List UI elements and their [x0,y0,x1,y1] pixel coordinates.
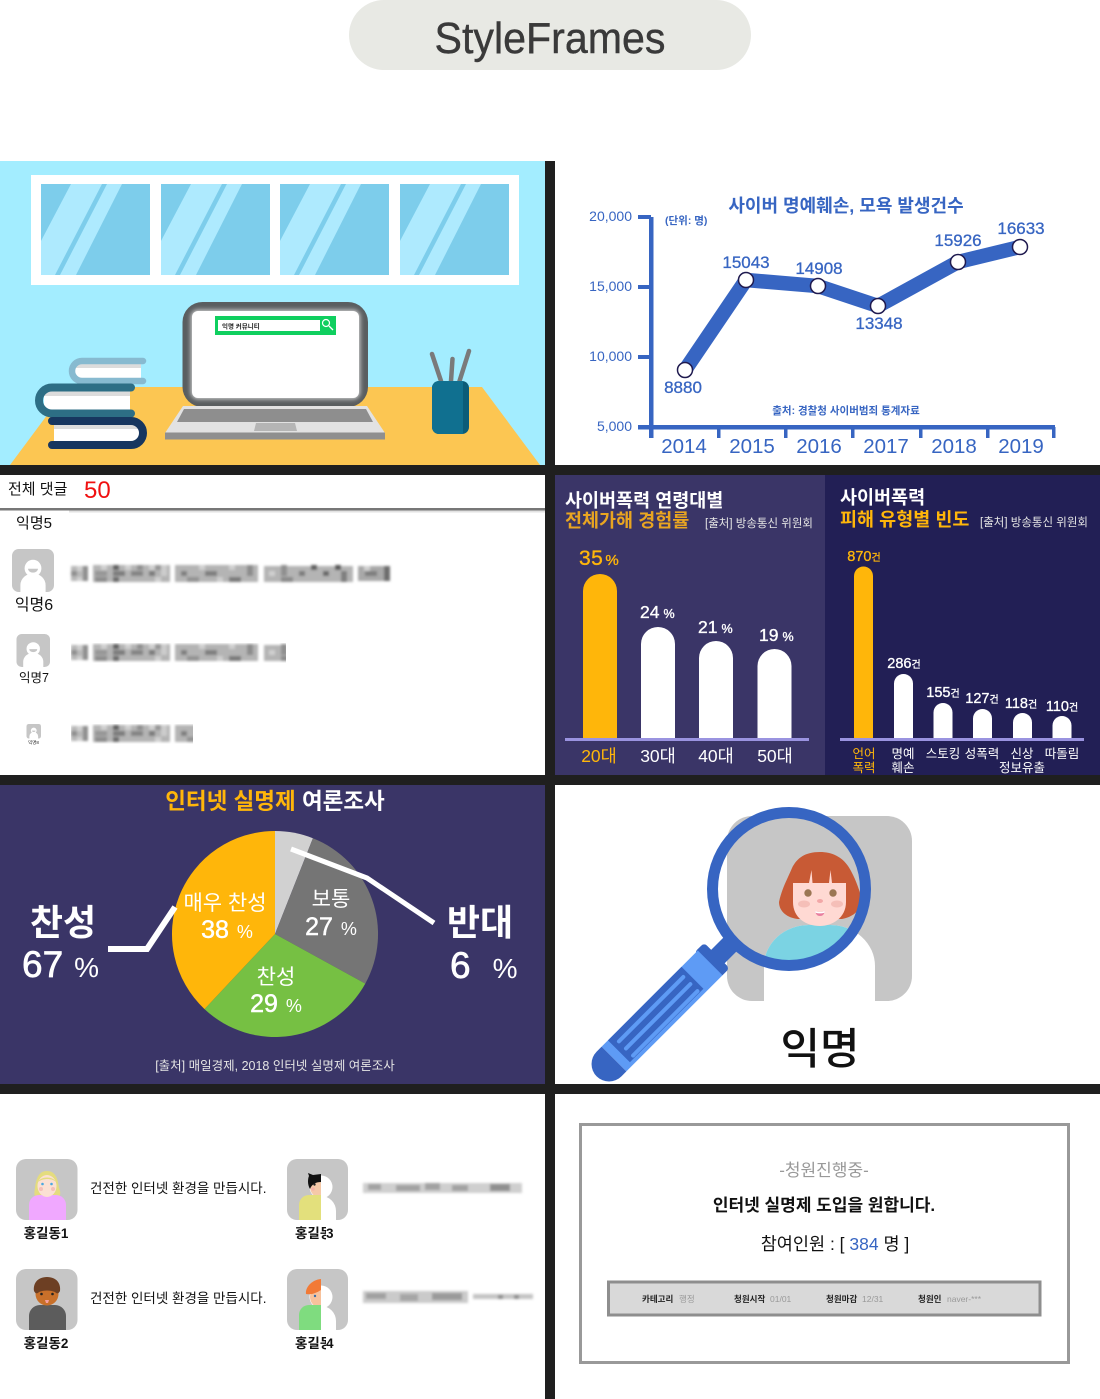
heading: 사이버폭력 [840,487,925,508]
slice labels: 보통 [312,888,350,911]
source: 출처: 경찰청 사이버범죄 통계자료 [772,404,920,417]
meta box: 01/01 [770,1294,792,1304]
age labels: 30대 [640,746,676,766]
data points [678,240,1028,378]
face in lens [766,852,860,960]
values: 127건 [965,691,999,707]
unit note: (단위: 명) [665,214,707,227]
values: 110건 [1046,699,1078,715]
data line [685,247,1020,370]
desk [10,387,540,465]
panel: age bar chart [555,475,825,775]
petition title: 인터넷 실명제 도입을 원합니다. [713,1196,935,1215]
total agree: 67 % [22,944,99,985]
heading: 인터넷 실명제 여론조사 [165,789,385,814]
comment: 익명6 [12,549,390,614]
comment: 홍길동3: 3 [326,1226,334,1241]
source: [출처] 매일경제, 2018 인터넷 실명제 여론조사 [155,1059,395,1073]
values [579,547,794,645]
label: 익명 [780,1026,860,1074]
heading: 피해 유형별 빈도 [840,509,969,530]
comment: 홍길동1: 건전한 인터넷 환경을 만듭시다. [90,1181,266,1196]
comment header: 50 [84,477,111,504]
meta box: 12/31 [862,1294,884,1304]
comment: 익명5: 익명5 [16,515,52,532]
comment: 홍길동4: 4 [326,1336,334,1351]
type labels: 성폭력 [965,747,999,761]
slice labels: 38 % [201,916,253,944]
values: 118건 [1005,696,1037,712]
type labels: 언어 [852,747,876,761]
meta box: 청원마감 [826,1294,857,1304]
values: 19 % [759,625,794,645]
values [847,549,1078,715]
status: -청원진행중- [779,1161,869,1180]
icon: laptop with search bar: 익명 커뮤니티 [222,322,260,330]
comment header [0,477,545,512]
data values: 8880 [664,378,702,397]
leader lines [108,849,434,949]
panel: named comments [16,1159,533,1351]
panel: anonymous magnifier [592,807,912,1082]
meta box: 청원인 [918,1294,942,1304]
type labels: 명예 [891,747,915,761]
window [31,175,519,285]
title pill: StyleFrames [434,14,666,63]
comment: 홍길동2: 홍길동2 [24,1335,68,1351]
avatar silhouette [727,816,912,1002]
x axis labels [661,435,1044,458]
type labels: 훼손 [891,761,915,775]
x axis labels: 2017 [863,435,909,458]
data values: 15926 [934,231,982,250]
icon: pen holder [432,351,469,434]
x axis labels: 2014 [661,435,707,458]
chart title: 사이버 명예훼손, 모욕 발생건수 [728,196,964,216]
data values: 16633 [997,219,1045,238]
type labels [852,747,1079,775]
type labels: 신상 [1010,747,1034,761]
total agree: 찬성 [30,902,96,943]
y axis labels [589,208,632,434]
data values: 14908 [795,259,843,278]
heading [840,487,969,530]
age labels [581,746,793,766]
heading: 전체가해 경험률 [565,510,689,531]
total against [447,902,517,986]
comment: 익명6: 익명6 [15,596,53,614]
data values [664,219,1045,397]
total against: 6 % [450,945,517,986]
meta box: naver-*** [947,1294,982,1304]
age labels: 40대 [698,746,734,766]
values: 870건 [847,549,881,565]
panel: desk illustration [0,161,545,465]
bars [565,574,809,741]
comment: 홍길동3: 홍길동 [295,1225,332,1241]
comment: 홍길동4: 홍길동 [295,1335,332,1351]
slice labels: 매우 찬성 [183,892,267,915]
comment: 홍길동1 [16,1159,266,1241]
source: [출처] 방송통신 위원회 [980,515,1088,529]
comment: 홍길동2 [16,1269,266,1351]
comment header: 전체 댓글 [8,481,68,498]
meta box [608,1282,1040,1315]
icon: stack of books [39,361,143,445]
y axis labels: 15,000 [589,278,632,294]
comment: 익명8: 익명8 [28,739,39,746]
participants: 참여인원 : [ 384 명 ] [761,1234,909,1254]
values: 21 % [698,617,733,637]
y axis labels: 10,000 [589,348,632,364]
x axis labels: 2019 [998,435,1044,458]
total against: 반대 [447,902,513,943]
x axis labels: 2015 [729,435,775,458]
comment: 홍길동4 [287,1269,533,1351]
comment: 홍길동2: 건전한 인터넷 환경을 만듭시다. [90,1291,266,1306]
meta box: 카테고리 [642,1294,673,1304]
comment: 익명7: 익명7 [19,671,49,685]
panel: victim type bar chart [825,475,1100,775]
comment: 홍길동3 [287,1159,522,1241]
meta box: 청원시작 [734,1294,765,1304]
data values: 15043 [722,253,770,272]
slice labels: 찬성 [257,966,295,989]
pie chart [172,831,378,1037]
data values: 13348 [855,314,903,333]
values: 24 % [640,602,675,622]
y axis labels: 20,000 [589,208,632,224]
x axis labels: 2018 [931,435,977,458]
total agree [22,902,99,985]
type labels: 폭력 [852,761,876,775]
comment: 익명8 [26,724,390,746]
bars [840,566,1084,741]
comment: 익명7 [16,634,390,685]
slice labels: 29 % [250,990,302,1018]
icon: magnifying glass [545,781,897,1133]
type labels: 스토킹 [926,747,960,761]
values: 286건 [887,656,921,672]
panel: line chart [589,196,1056,458]
meta box: 행정 [679,1294,695,1304]
icon: laptop with search bar [165,302,385,440]
type labels: 정보유출 [999,761,1045,775]
values: 155건 [926,685,960,701]
panel: poll pie chart [0,785,545,1084]
panel: petition [580,1124,1068,1362]
age labels: 20대 [581,746,617,766]
source: [출처] 방송통신 위원회 [705,516,813,530]
x axis labels: 2016 [796,435,842,458]
title pill [349,0,751,70]
slice labels [183,888,357,1018]
heading [565,490,723,531]
panel: comments [0,477,545,746]
axes [638,215,1056,438]
y axis labels: 5,000 [597,418,632,434]
slice labels: 27 % [305,913,357,941]
heading: 사이버폭력 연령대별 [565,490,723,511]
comment: 홍길동1: 홍길동1 [24,1225,69,1241]
values: 35% [579,547,619,570]
age labels: 50대 [757,746,793,766]
type labels: 따돌림 [1045,747,1079,761]
